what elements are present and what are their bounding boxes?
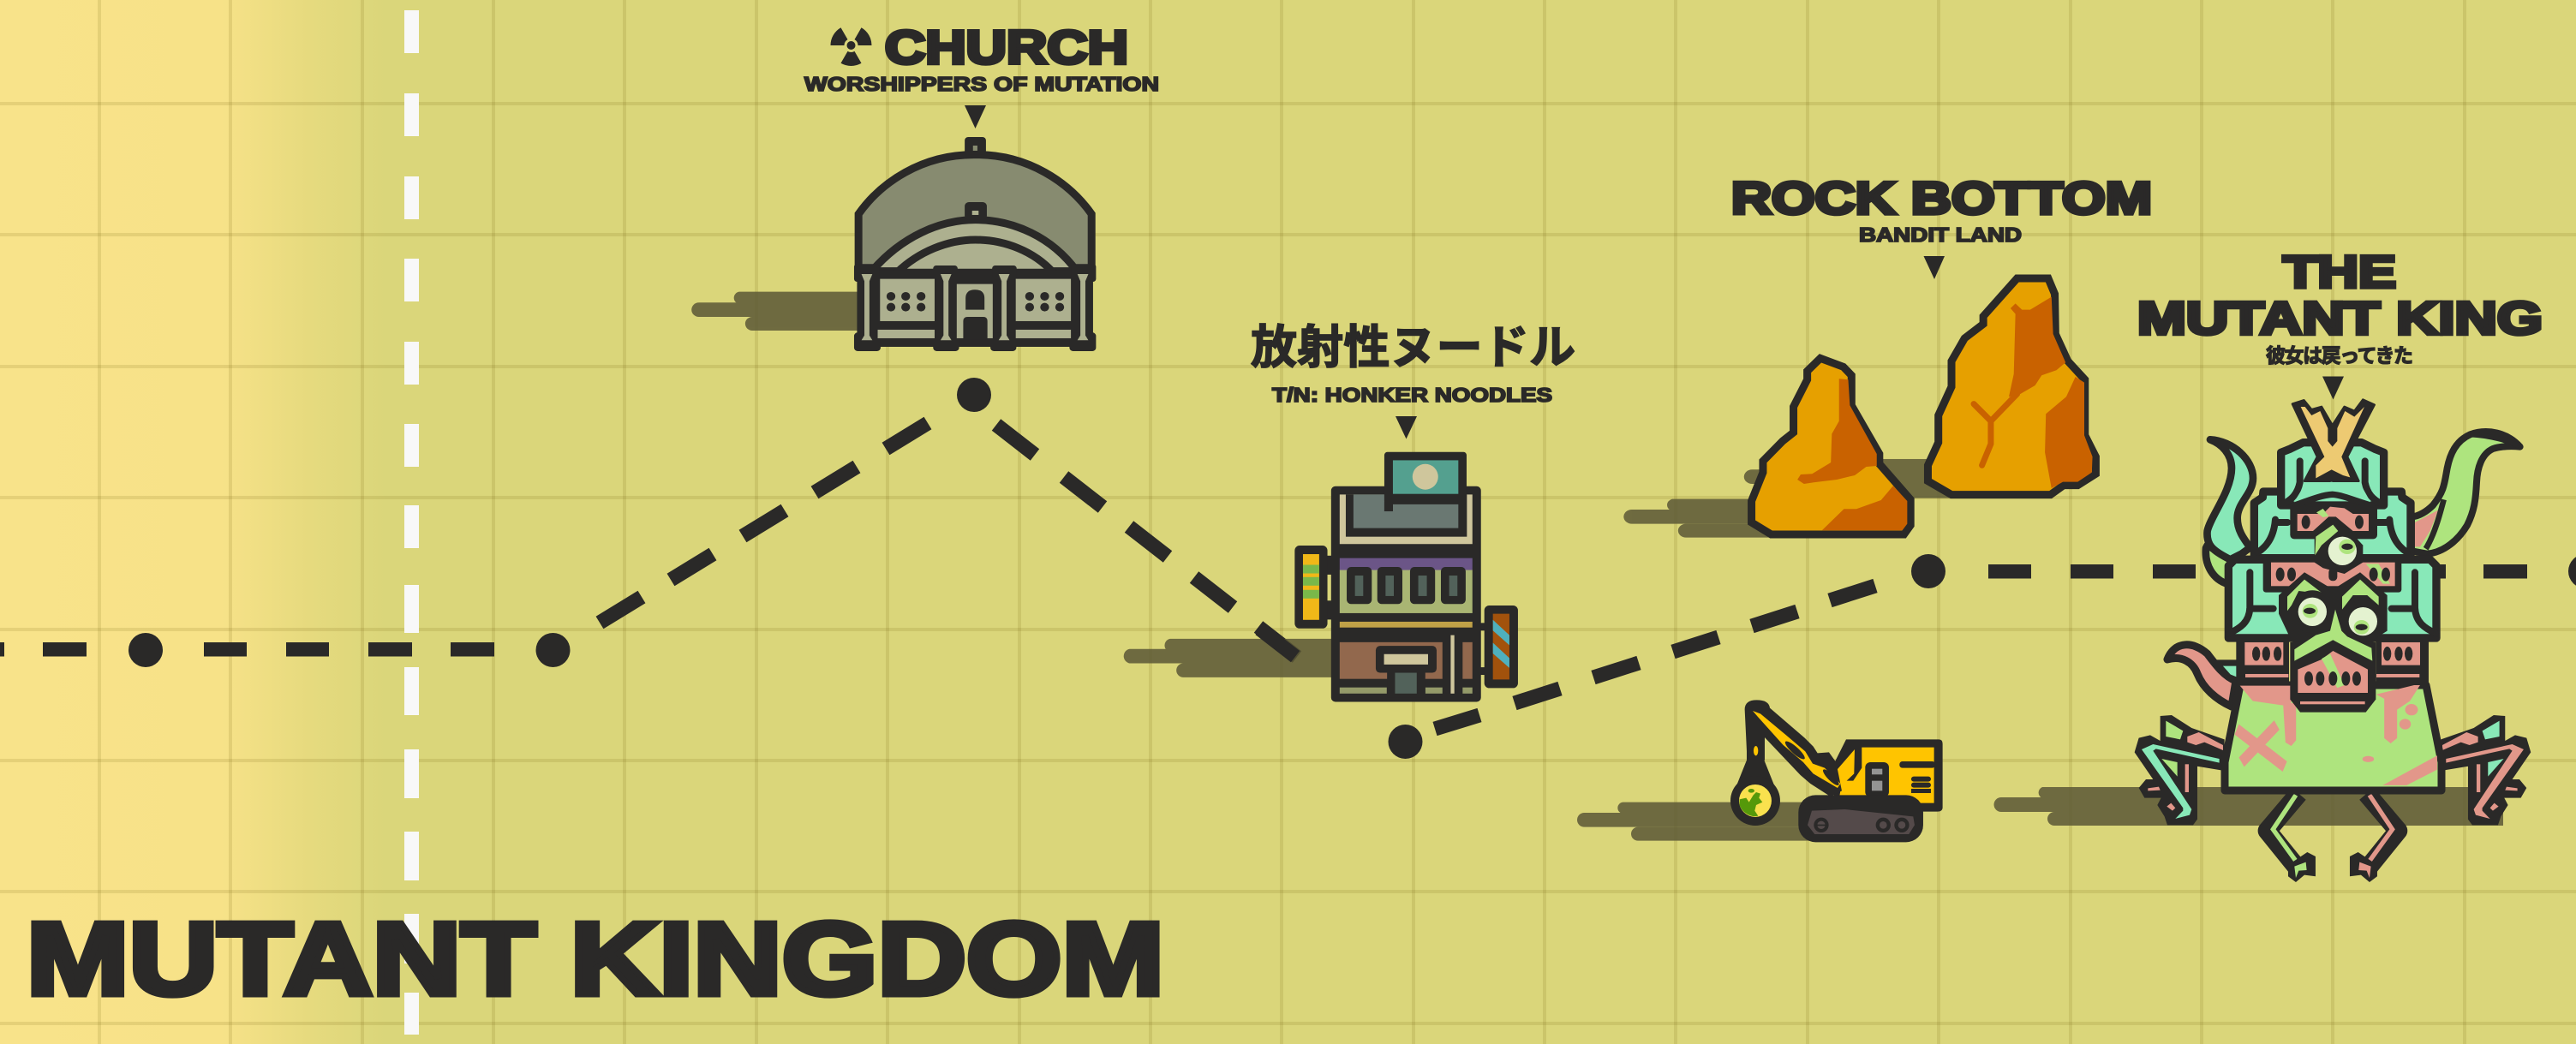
king ground shadow [1994, 787, 2503, 826]
church ground shadow [691, 292, 875, 331]
title: Mutant Kingdom: MUTANT KINGDOM [27, 901, 1164, 1017]
mutant king japanese subtitle: 彼女は戻ってきた [2266, 344, 2413, 367]
right face eye [2341, 600, 2384, 643]
mutant king title line two: MUTANT KING [2137, 293, 2543, 344]
king right horn [2412, 432, 2520, 554]
crane tracks [1798, 795, 1923, 842]
route: dashed path with stops [0, 378, 2576, 759]
heading: the mutant king [2137, 248, 2543, 399]
heading: noodle shop [1251, 322, 1575, 438]
icon: noodle shop building [1124, 452, 1518, 701]
arrow: church pointer [965, 105, 986, 128]
armour top tier [2281, 443, 2384, 505]
large rock [1928, 278, 2095, 495]
small rock [1752, 358, 1910, 534]
mutant king title line one: THE [2283, 248, 2396, 298]
lower face plate [2279, 572, 2388, 638]
helmet gold crest [2290, 400, 2376, 507]
armour lower tier [2228, 559, 2436, 638]
white dashed border line [404, 10, 419, 1035]
king left limbs [2135, 715, 2316, 882]
king left tentacle [2167, 645, 2242, 707]
king robe body [2225, 685, 2442, 790]
icon: radiation symbol [830, 27, 872, 66]
king left horn [2206, 439, 2253, 584]
icon: church building [691, 137, 1096, 351]
left lantern sign [1294, 546, 1328, 629]
rock bottom title text: ROCK BOTTOM [1731, 173, 2152, 224]
left face eye [2291, 590, 2334, 633]
rocks ground shadow [1623, 459, 1955, 538]
noodle shop ground shadow [1124, 639, 1335, 677]
armour inner seams [2365, 461, 2436, 634]
arrow: rock bottom pointer [1924, 256, 1945, 279]
heading: rock bottom [1731, 173, 2152, 279]
crane boom [1745, 700, 1842, 796]
crane wrecking ball [1730, 731, 1780, 826]
church title text: CHURCH [885, 21, 1128, 74]
arrow: mutant king pointer [2322, 377, 2344, 399]
noodle shop japanese title: 放射性ヌードル [1251, 322, 1575, 373]
rock bottom subtitle text: BANDIT LAND [1859, 224, 2022, 246]
church subtitle text: WORSHIPPERS OF MUTATION [804, 73, 1159, 95]
character: the mutant king [1994, 400, 2531, 882]
noodle dash over shadow [1260, 629, 1295, 657]
armour middle tier [2254, 492, 2411, 558]
top eye [2315, 522, 2363, 581]
heading: church [804, 21, 1159, 128]
king robe pink splatter [2237, 683, 2437, 785]
helmet top band [2290, 505, 2377, 539]
arrow: noodle shop pointer [1396, 416, 1417, 438]
helmet middle band [2263, 556, 2401, 593]
crane ground shadow [1577, 802, 1810, 841]
icon: wrecking crane [1577, 700, 1943, 842]
armour side plates [2376, 638, 2429, 685]
icon: rock formations [1623, 278, 2095, 538]
king head and armour [2228, 400, 2520, 713]
right lantern sign [1485, 606, 1518, 688]
noodle shop translation note: T/N: HONKER NOODLES [1272, 384, 1552, 406]
king right limbs [2350, 715, 2531, 882]
king mask mouth [2290, 610, 2376, 713]
crane cab [1833, 739, 1943, 812]
